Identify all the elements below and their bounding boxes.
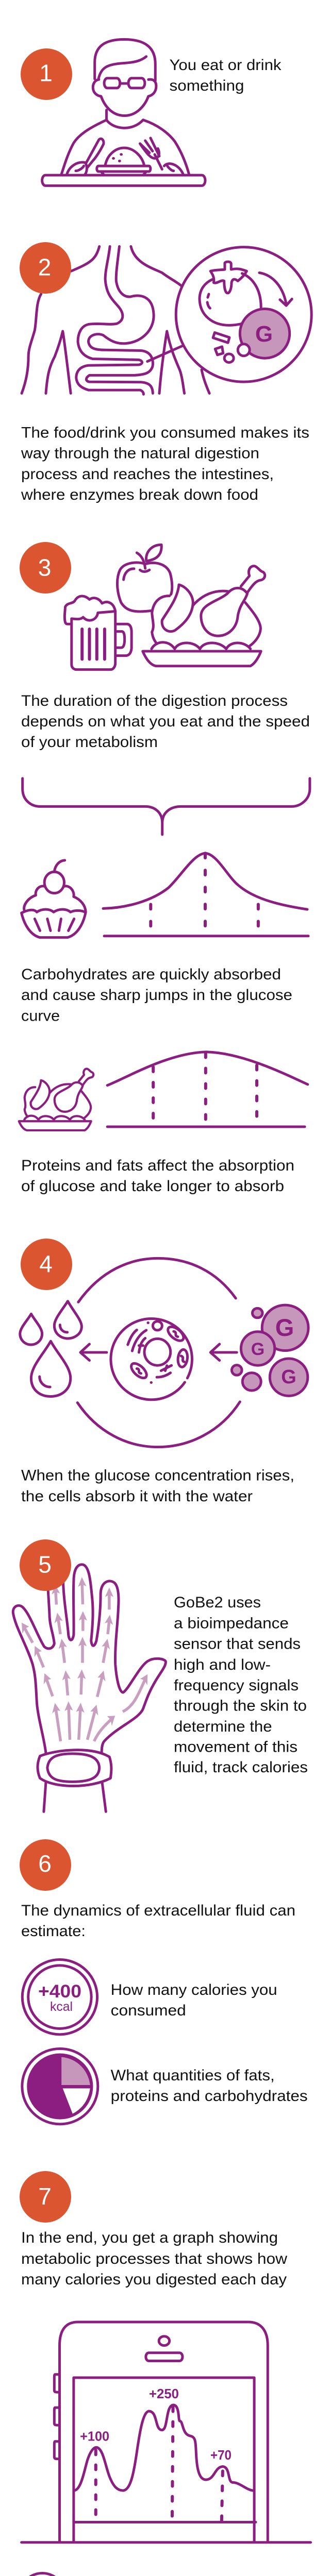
text: calories consumed [111,1981,277,2019]
number badge 2: 2 [38,253,51,280]
number badge 7: 7 [38,2183,52,2210]
text: proteins and fats [21,1157,294,1195]
arrow: cell to water [80,1344,107,1360]
number badge 5: 5 [38,1551,52,1578]
number badge 5 [20,1539,71,1591]
icon: clock [20,2573,64,2576]
chart: sharp glucose curve [103,853,308,936]
number badge 1: 1 [39,60,53,87]
icon: +400 kcal badge: kcal [50,1999,73,2014]
text: step 7: metabolic processes that shows how [21,2250,287,2267]
number badge 3 [20,542,71,594]
text: carbohydrates: and cause sharp jumps in the glucose [21,987,292,1004]
number badge 4: 4 [39,1250,53,1277]
text: step 5: high and low- [174,1656,271,1673]
icon: glucose molecules [232,1305,308,1396]
illustration: person eating [42,40,205,185]
number badge 4 [21,1239,72,1290]
text: step 3: of your metabolism [21,734,158,751]
text: step 7: many calories you digested each day [21,2271,287,2288]
illustration: torso with digestive tract [22,246,209,394]
illustration: phone with calorie graph: +100 [80,2429,109,2444]
text: step 3: depends on what you eat and the speed [21,713,310,730]
magnified circle: food breaking down into glucose [176,247,311,382]
text: step 2 [21,425,309,503]
text: step 4: When the glucose concentration rises, [21,1467,294,1484]
icon: water drops [20,1301,81,1396]
text: step 2: process and reaches the intestines, [21,466,274,483]
icon: beer mug [64,596,131,670]
text: step 1 [169,57,282,94]
icon: cupcake [22,860,86,938]
text: step 2: The food/drink you consumed makes its [21,425,309,441]
text: calories consumed: How many calories you [111,1981,277,1998]
text: step 1: You eat or drink [169,57,282,74]
text: step 6 intro [21,1902,295,1940]
text: macronutrient quantities [111,2067,308,2105]
text: step 5: movement of this [174,1738,298,1755]
text: step 4 [21,1467,294,1505]
text: step 5: frequency signals [174,1677,299,1694]
illustration: phone with calorie graph [22,2322,311,2543]
icon: roast chicken on a platter [143,566,265,666]
text: step 5: sensor that sends [174,1636,301,1653]
text: step 5: determine the [174,1718,272,1735]
text: step 5: GoBe2 uses [174,1594,261,1611]
illustration: phone with calorie graph: +250 [149,2386,179,2401]
text: step 5: through the skin to [174,1698,307,1715]
text: step 5 [174,1594,308,1776]
icon: +400 kcal badge: +400 [38,1981,81,2002]
text: proteins and fats: Proteins and fats affect the absorption [21,1157,294,1174]
number badge 2 [20,242,71,294]
text: carbohydrates: Carbohydrates are quickly absorbed [21,966,281,983]
text: proteins and fats: of glucose and take longer to absorb [21,1178,284,1195]
number badge 1 [21,48,72,100]
number badge 6: 6 [38,1850,52,1877]
text: step 6 intro: estimate: [21,1923,86,1940]
text: step 3 [21,692,310,751]
text: step 7 [21,2229,287,2288]
chart: gentle glucose curve [107,1052,308,1127]
cycle arcs [77,1258,240,1447]
curly bracket [23,778,310,835]
text: carbohydrates [21,966,292,1024]
text: step 6 intro: The dynamics of extracellular fluid can [21,1902,295,1919]
icon: glucose molecules: G [281,1366,296,1388]
text: step 5: fluid, track calories [174,1759,308,1776]
number badge 3: 3 [38,554,51,581]
icon: apple [117,545,172,612]
illustration: hand with fitness band and signal arrows [13,1565,166,1811]
text: step 7: In the end, you get a graph showing [21,2229,278,2246]
icon: macronutrient pie chart [22,2048,98,2124]
icon: small roast chicken [19,1069,93,1130]
letter G: glucose: G [255,321,273,347]
text: step 3: The duration of the digestion process [21,692,288,709]
text: step 5: a bioimpedance [174,1615,289,1632]
text: macronutrient quantities: What quantities of fats, [111,2067,275,2084]
number badge 7 [20,2171,71,2223]
text: step 2: way through the natural digestion [21,445,259,462]
text: calories consumed: consumed [111,2002,186,2019]
text: macronutrient quantities: proteins and carbohydrates [111,2088,308,2105]
text: step 4: the cells absorb it with the water [21,1488,253,1505]
text: step 2: where enzymes break down food [21,486,258,503]
text: carbohydrates: curve [21,1008,60,1024]
icon: cell [111,1318,192,1400]
illustration: phone with calorie graph: +70 [210,2447,232,2463]
icon: glucose molecules: G [251,1340,265,1359]
icon: glucose molecules: G [275,1314,294,1341]
icon: +400 kcal badge [22,1960,97,2035]
number badge 6 [20,1839,71,1891]
text: step 1: something [169,77,244,94]
arrow: glucose to cell [210,1344,237,1360]
